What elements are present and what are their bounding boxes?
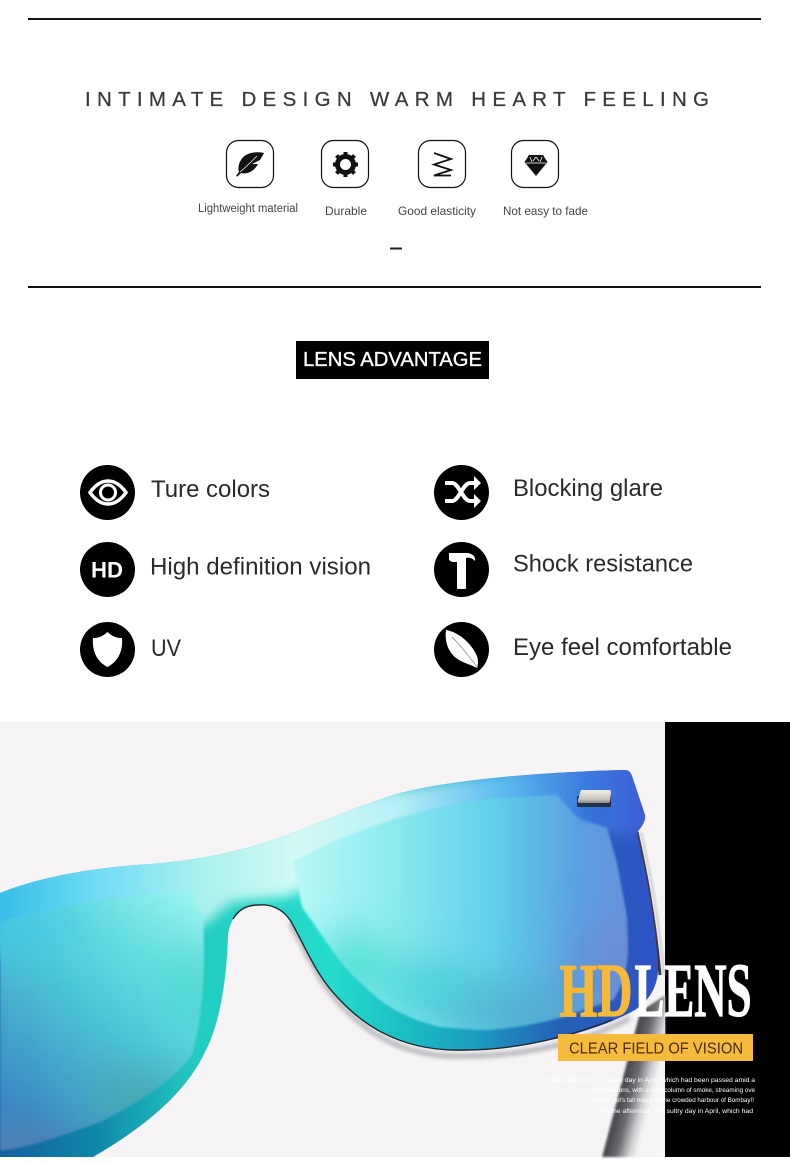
label: Good elasticity xyxy=(398,204,476,218)
feature: not easy to fade xyxy=(503,140,588,218)
banner: clear field of vision xyxy=(558,1034,753,1061)
title: INTIMATE DESIGN WARM HEART FEELING xyxy=(85,88,709,111)
small caption: of exhalations, with a long column of smoke, streaming ove xyxy=(590,1088,756,1094)
heading: lens advantage: LENS ADVANTAGE xyxy=(303,348,482,371)
small caption: the Mongol's tall masts in the crowded harbour of Bombay!! xyxy=(590,1098,754,1104)
small caption: On the afternoon of a sultry day in April, which had xyxy=(600,1109,753,1115)
lens shadow xyxy=(290,923,630,1056)
item: eye feel comfortable xyxy=(434,622,732,677)
photo background xyxy=(0,722,665,1157)
item: shock resistance xyxy=(434,542,693,597)
panel: product photo xyxy=(0,722,790,1165)
item: blocking glare: Blocking glare xyxy=(513,475,663,502)
lens xyxy=(0,770,658,1157)
item: shock resistance: Shock resistance xyxy=(513,550,693,578)
feature: good elasticity xyxy=(398,140,476,218)
item: high definition vision xyxy=(80,542,371,597)
feature: lightweight material xyxy=(198,140,298,215)
lens stud xyxy=(577,790,612,822)
label: Not easy to fade xyxy=(503,204,588,218)
panel: lens advantages list xyxy=(80,465,732,677)
headline: HD LENS xyxy=(560,949,752,1033)
item: UV xyxy=(80,622,181,677)
item: true colors: Ture colors xyxy=(151,476,270,503)
small caption xyxy=(541,1078,756,1115)
glasses temple arm xyxy=(602,832,665,1157)
item: eye feel comfortable: Eye feel comfortable xyxy=(513,634,732,661)
banner: clear field of vision: CLEAR FIELD OF VISION xyxy=(569,1040,743,1058)
headline: HD LENS: HD xyxy=(560,949,632,1033)
item: high definition vision: HD xyxy=(91,558,123,582)
icon: feather xyxy=(226,140,274,188)
right mirror panel xyxy=(293,794,629,1031)
icon: spring xyxy=(418,140,466,188)
feature: durable xyxy=(322,140,368,218)
dash xyxy=(390,248,402,250)
icon: diamond xyxy=(512,140,558,188)
black side panel xyxy=(665,722,790,1157)
label: Lightweight material xyxy=(198,203,298,215)
left mirror panel xyxy=(0,894,206,1152)
item: blocking glare xyxy=(434,465,663,520)
heading: lens advantage xyxy=(296,341,489,379)
top divider xyxy=(28,18,761,20)
small caption: On the afternoon of a sultry day in April, which had been passed amid a xyxy=(541,1078,756,1084)
label: Durable xyxy=(325,204,367,218)
item: high definition vision: High definition vision xyxy=(150,554,371,580)
lens dark edge xyxy=(233,905,612,1050)
item: UV: UV xyxy=(151,635,181,662)
icon: gear xyxy=(322,140,368,188)
second divider xyxy=(28,286,761,288)
item: true colors xyxy=(80,465,270,520)
